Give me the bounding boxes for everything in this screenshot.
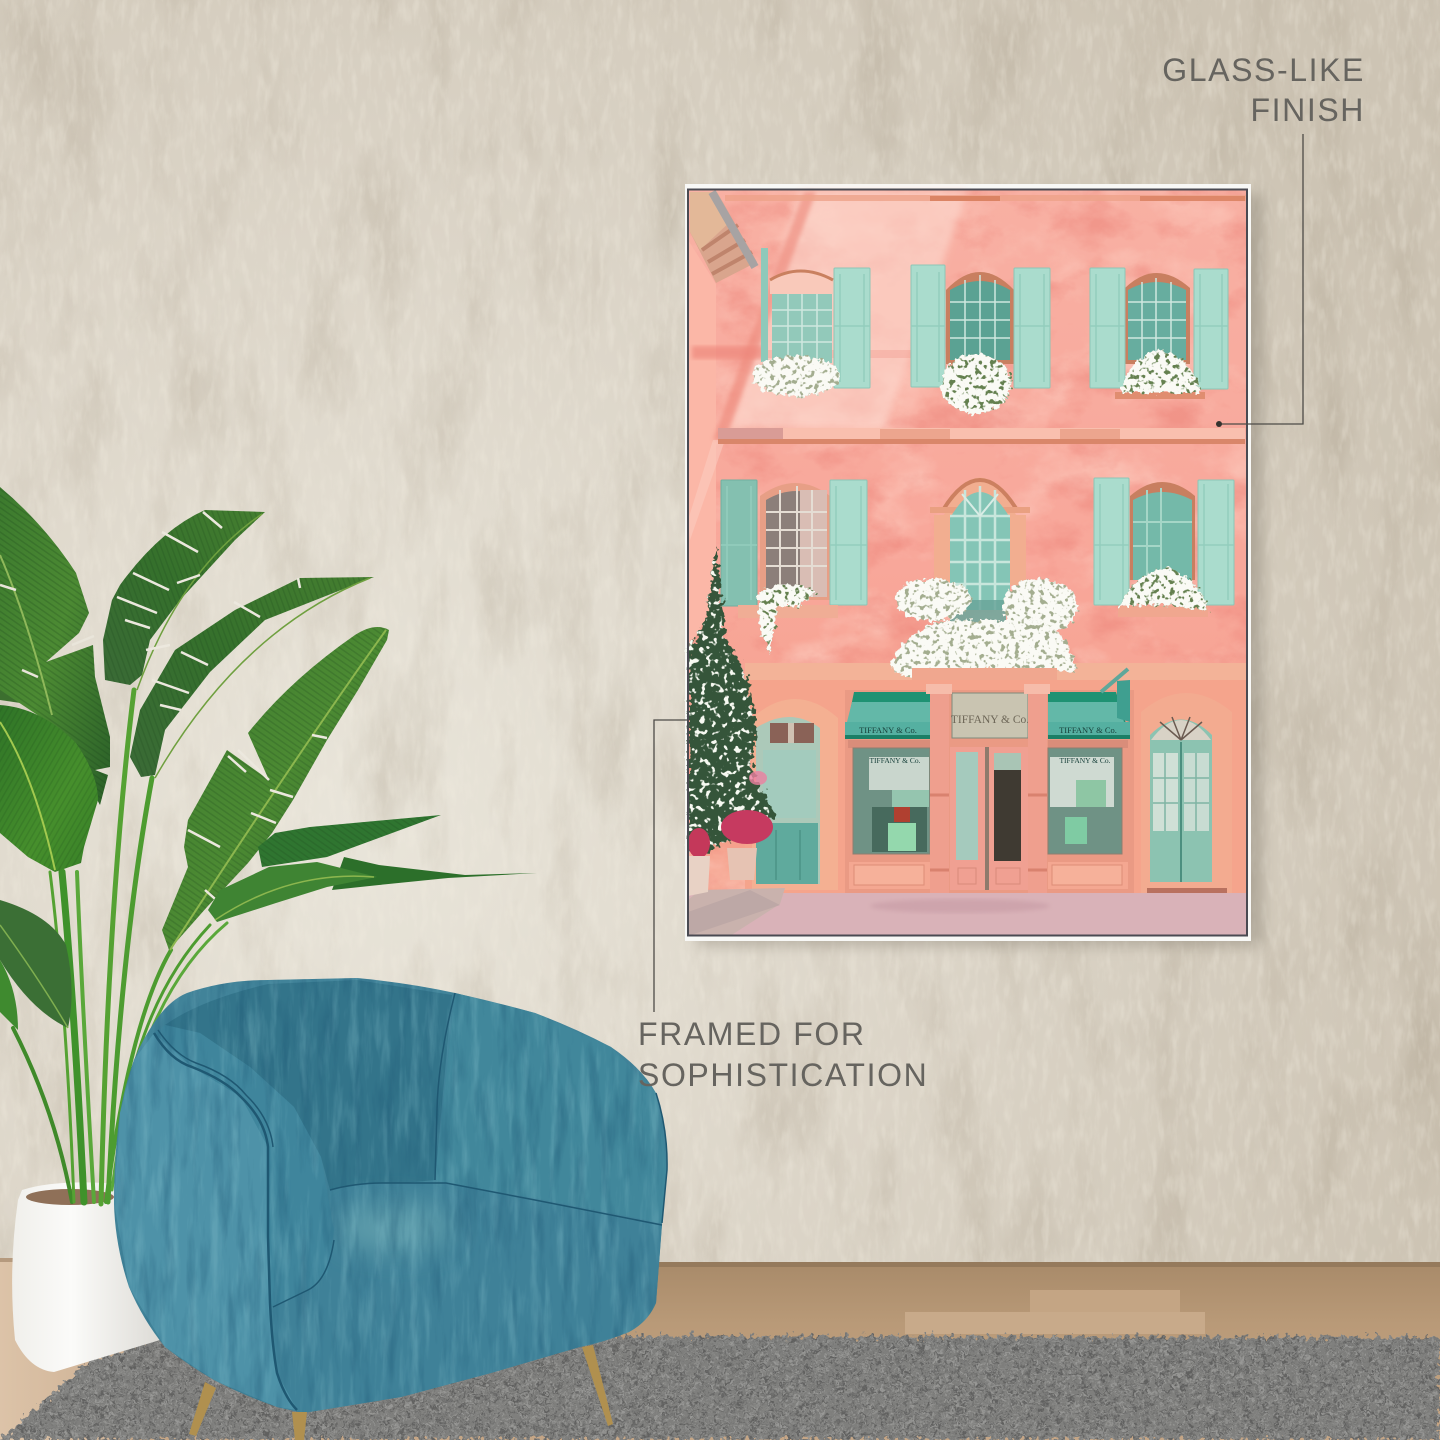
chair seams	[154, 993, 667, 1410]
callout: framed for sophistication: SOPHISTICATION	[638, 1057, 928, 1093]
leaf: upper right blade	[258, 815, 441, 867]
balcony flowers	[890, 579, 1078, 677]
callout: glass-like finish: GLASS-LIKE	[1162, 52, 1365, 88]
callout: framed for sophistication: FRAMED FOR	[638, 1016, 866, 1052]
window 1 top	[752, 248, 870, 396]
shop level wall	[745, 680, 1247, 893]
center doors	[950, 747, 1028, 890]
callout: framed for sophistication	[638, 720, 928, 1093]
grey rug	[0, 1336, 1440, 1440]
left side wall	[688, 240, 716, 650]
chair side panel	[114, 1033, 297, 1410]
hanging sign	[1101, 669, 1130, 722]
window 3 top	[1090, 268, 1228, 399]
right awning: TIFFANY & Co.	[1059, 725, 1117, 735]
leaf: top centre	[103, 510, 265, 690]
columns	[926, 684, 1050, 893]
storefront	[845, 669, 1134, 893]
leaf: front left bright	[0, 705, 98, 872]
painted facade	[688, 190, 1247, 936]
window 1 middle	[721, 480, 867, 655]
chair back left panel	[165, 980, 452, 1190]
left awning	[845, 692, 930, 739]
sign panel	[951, 693, 1029, 738]
frame shadow	[697, 194, 1263, 946]
wood floor	[0, 1258, 1440, 1440]
seat highlight	[335, 1204, 455, 1252]
window 2 arched center	[930, 478, 1030, 610]
leaf: top left	[0, 487, 110, 805]
chair silhouette	[114, 978, 667, 1413]
right display window: TIFFANY & Co.	[1059, 756, 1111, 765]
callout: glass-like finish: FINISH	[1250, 92, 1365, 128]
red reflection streaks	[713, 192, 816, 440]
middle row windows	[721, 478, 1234, 655]
callout: glass-like finish	[1162, 52, 1365, 427]
leaf: lower left	[0, 900, 72, 1030]
flowering tree	[688, 545, 775, 852]
inner dark edge	[688, 190, 1247, 936]
left display window: TIFFANY & Co.	[869, 756, 921, 765]
leaf: long right with tail	[162, 627, 537, 950]
leaf: behind left	[0, 610, 34, 705]
stems	[13, 690, 227, 1204]
framed artwork	[685, 184, 1263, 946]
roof eave	[690, 192, 757, 283]
chair back right panel	[435, 993, 667, 1223]
velvet light streaks	[114, 978, 667, 1413]
window 3 middle	[1094, 478, 1234, 617]
right display window	[1048, 748, 1122, 854]
sign panel: TIFFANY & Co.	[951, 714, 1029, 726]
pale glass reflection	[730, 190, 968, 428]
balcony base	[912, 668, 1057, 680]
pavement and steps	[688, 888, 1247, 936]
top row windows	[752, 248, 1228, 414]
armchair	[114, 978, 667, 1440]
leaf: middle long	[130, 577, 374, 778]
left awning: TIFFANY & Co.	[859, 725, 917, 735]
potted flowers	[688, 771, 773, 896]
left teal door	[752, 699, 838, 890]
leaf: lower right blade	[208, 862, 377, 922]
plant pot	[12, 1182, 160, 1372]
window 2 top	[911, 265, 1050, 414]
seat cushion	[273, 1183, 662, 1413]
lower panels	[849, 862, 1128, 889]
chair arm	[154, 1025, 334, 1307]
right awning	[1048, 692, 1130, 739]
right teal door	[1141, 693, 1232, 899]
white frame	[685, 184, 1251, 941]
mid cornice	[718, 428, 1245, 444]
left display window	[853, 748, 930, 854]
plant	[0, 487, 537, 1204]
top cornice	[725, 195, 1247, 201]
chair legs	[189, 1345, 613, 1440]
lower ledge	[745, 663, 1247, 680]
velvet dark streaks	[114, 978, 667, 1413]
